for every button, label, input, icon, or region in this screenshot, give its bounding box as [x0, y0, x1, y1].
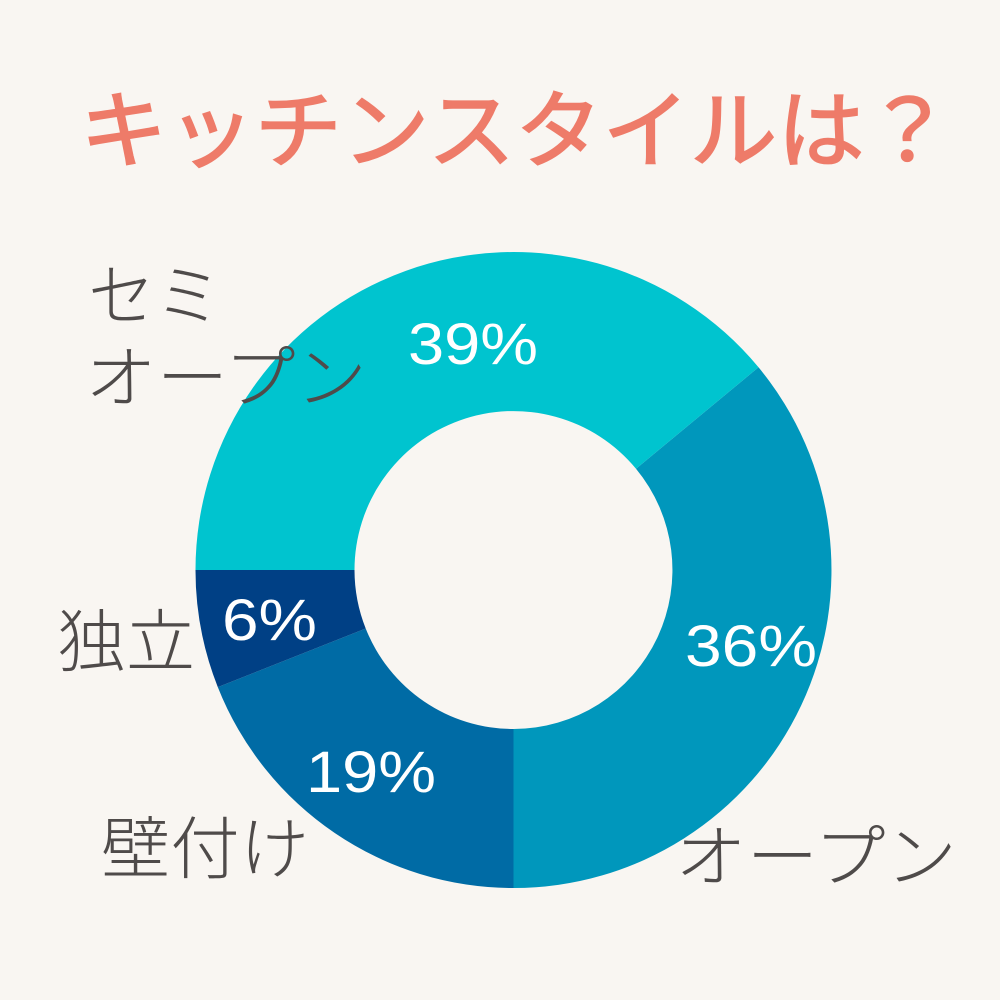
segment: closed 6%: [195, 570, 366, 687]
label: closed: 独立: [57, 605, 195, 681]
label: open: オープン: [675, 820, 957, 896]
label: semi-open: [85, 259, 367, 417]
segment: open 36%: [514, 367, 831, 888]
value: 6%: 6%: [222, 588, 317, 653]
donut chart: [195, 252, 831, 888]
segment: wall 19%: [218, 628, 514, 888]
value: 19%: 19%: [306, 740, 436, 805]
value: 36%: 36%: [685, 614, 817, 679]
value: 39%: 39%: [408, 312, 538, 377]
label: wall: 壁付け: [101, 812, 309, 888]
title: キッチンスタイルは？: [80, 85, 952, 180]
segment: semi-open 39%: [196, 252, 758, 570]
label: semi-open: オープン: [85, 341, 367, 417]
label: semi-open: セミ: [88, 259, 222, 335]
